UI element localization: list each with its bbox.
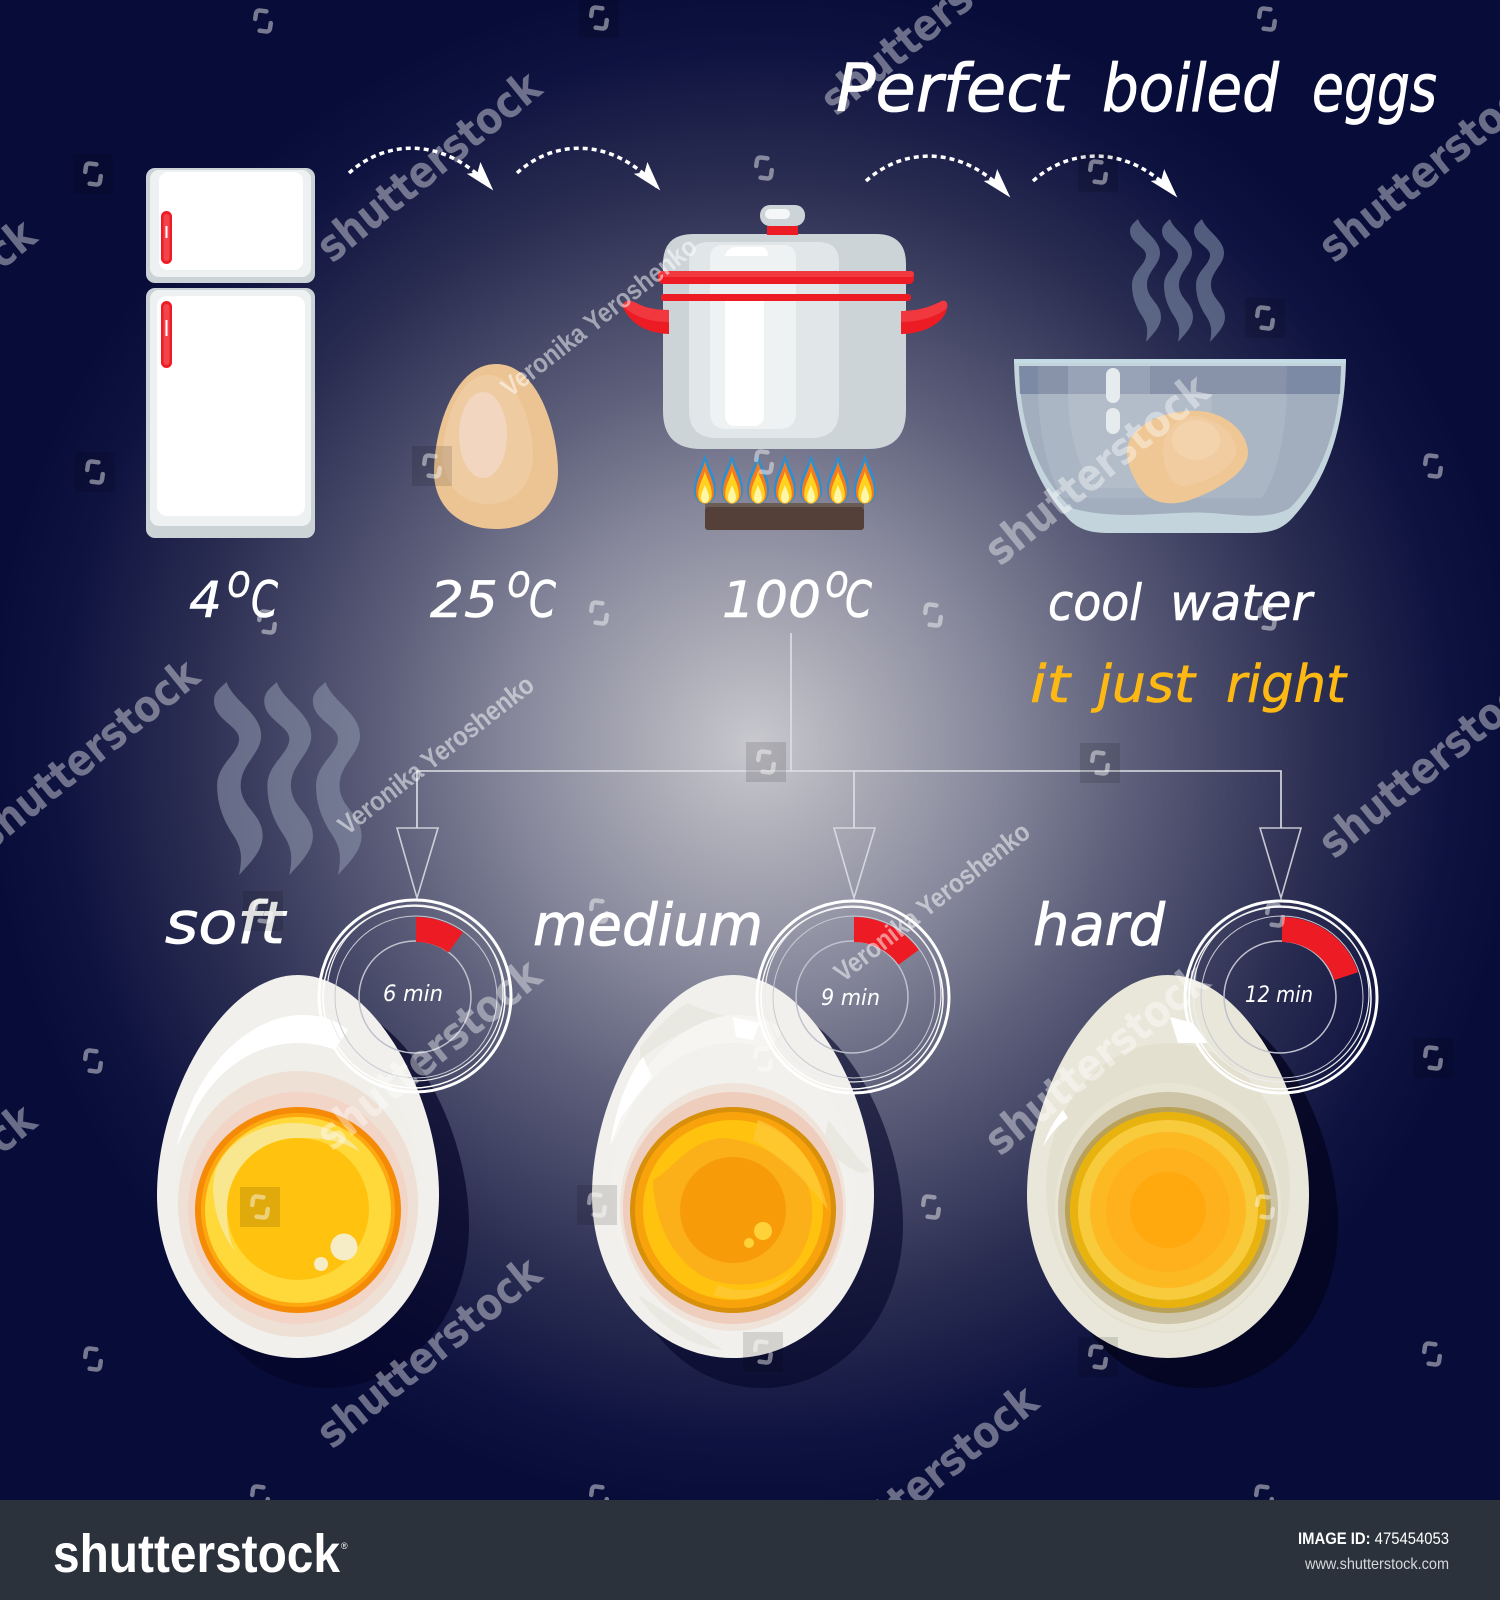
icon: glass bowl with egg <box>1014 361 1346 533</box>
arrow: into cool water <box>1033 156 1176 196</box>
label: it just right: just <box>1091 655 1197 715</box>
watermarks: shutterstock <box>307 948 552 1161</box>
timer arc <box>1282 917 1358 980</box>
watermarks: shutterstock <box>975 953 1220 1166</box>
label: 25 degrees: o <box>507 554 531 608</box>
gauge: 6 min <box>319 900 511 1092</box>
label: 25 degrees <box>430 554 556 629</box>
label: 25 degrees: 25 <box>430 571 498 629</box>
icon: pot on gas burner <box>622 205 947 530</box>
icon: burner <box>705 503 864 530</box>
arrow: pot to bowl <box>866 156 1009 196</box>
icon: pot handles <box>622 301 947 334</box>
image id: IMAGE ID: 475454053 <box>1298 1529 1449 1548</box>
label: hard: hard <box>1033 891 1166 959</box>
egg: soft boiled <box>157 975 469 1388</box>
icon: refrigerator <box>146 168 315 538</box>
connector tree <box>397 633 1301 898</box>
label: 100 degrees: C <box>845 571 872 629</box>
icon: flames <box>694 454 876 504</box>
label: soft: soft <box>165 889 287 957</box>
arrow: egg to pot <box>517 148 659 189</box>
footer bar <box>0 1500 1500 1600</box>
icon: room temperature egg <box>434 364 558 529</box>
label: 100 degrees: 100 <box>722 571 821 629</box>
yolk: runny <box>195 1107 401 1313</box>
yolk: firm <box>1065 1107 1271 1313</box>
icon: small steam over bowl <box>1130 219 1225 342</box>
label: cool water: cool <box>1048 574 1142 632</box>
label: cool water <box>1048 574 1315 632</box>
icon: large steam <box>214 682 362 875</box>
timer arc <box>416 917 463 952</box>
watermarks: shutterstock <box>307 60 552 273</box>
yolk: jammy <box>630 1107 836 1313</box>
label: 4 degrees: C <box>251 571 278 629</box>
label: cool water: water <box>1170 574 1315 632</box>
label: 100 degrees <box>722 554 872 629</box>
egg: hard boiled <box>1027 975 1338 1388</box>
label: 25 degrees: C <box>529 571 556 629</box>
timer arc <box>854 917 919 965</box>
watermarks: Veronika Yeroshenko <box>828 816 1036 988</box>
title <box>836 50 1437 127</box>
gauge: 6 min: 6 min <box>383 982 443 1007</box>
gauge: 12 min: 12 min <box>1245 983 1313 1008</box>
website: www.shutterstock.com <box>1304 1556 1449 1573</box>
watermarks: shutterstock <box>307 1246 552 1459</box>
watermarks: shutterstock <box>804 1374 1049 1587</box>
footer logo: shutterstock <box>53 1524 341 1584</box>
watermarks: shutterstock <box>975 363 1220 576</box>
gauge: 9 min <box>757 901 949 1093</box>
label: medium: medium <box>533 891 763 959</box>
gauge: 12 min <box>1185 901 1377 1093</box>
label: 100 degrees: o <box>825 554 849 608</box>
icon: pot body <box>663 300 906 449</box>
registered mark: ® <box>341 1541 348 1551</box>
label: 4 degrees <box>189 554 278 629</box>
watermark stamp backings <box>73 0 1453 1377</box>
label: it just right: it <box>1030 655 1072 715</box>
label: it just right: right <box>1226 655 1348 715</box>
arrow: fridge to egg <box>349 148 492 189</box>
title: Perfect <box>836 50 1070 127</box>
title: boiled <box>1102 50 1280 127</box>
watermarks: Veronika Yeroshenko <box>332 669 540 841</box>
egg: medium boiled <box>592 975 903 1388</box>
icon: pot lid <box>658 205 914 301</box>
gauge: 9 min: 9 min <box>821 986 880 1011</box>
label: 4 degrees: 4 <box>189 571 222 629</box>
title: eggs <box>1312 50 1437 127</box>
label: it just right <box>1030 655 1348 715</box>
watermarks: Veronika Yeroshenko <box>495 231 703 403</box>
label: 4 degrees: o <box>227 554 251 608</box>
